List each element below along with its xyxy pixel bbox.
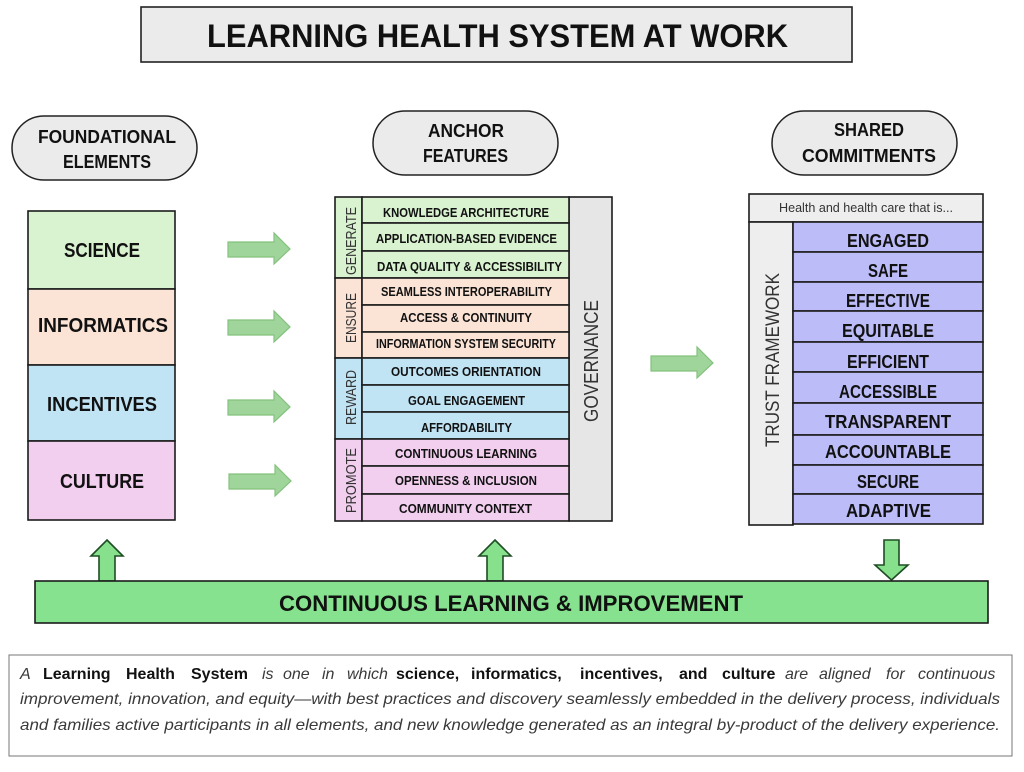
commitment list: EFFICIENT [847, 352, 929, 372]
definition text box: Learning [43, 666, 111, 683]
trust framework column [749, 222, 793, 525]
group: generate [335, 197, 569, 278]
arrow: features to commitments [651, 347, 713, 378]
arrow: incentives to features [228, 391, 290, 422]
block: science [28, 211, 175, 289]
trust framework column: TRUST FRAMEWORK [763, 273, 784, 447]
banner: continuous learning and improvement [35, 581, 988, 623]
block: culture [28, 441, 175, 520]
header: health and health care: Health and health care that is... [779, 200, 953, 215]
group: generate: KNOWLEDGE ARCHITECTURE [383, 205, 549, 220]
arrow: improvement up to anchor features [479, 540, 511, 581]
heading: foundational elements: FOUNDATIONAL [38, 127, 176, 147]
definition text box: one [283, 666, 310, 683]
definition text box: and [679, 666, 707, 683]
heading: foundational elements: ELEMENTS [63, 152, 151, 172]
group: generate: GENERATE [343, 207, 360, 275]
block: informatics: INFORMATICS [38, 315, 168, 337]
arrow: culture to features [229, 465, 291, 496]
commitment list: ADAPTIVE [846, 501, 931, 521]
heading: shared commitments: COMMITMENTS [802, 146, 936, 166]
block: incentives: INCENTIVES [47, 394, 157, 416]
commitment list: SAFE [868, 261, 908, 281]
banner: continuous learning and improvement: CONTINUOUS LEARNING & IMPROVEMENT [279, 591, 744, 616]
arrow: improvement up to foundational elements [91, 540, 123, 581]
heading: shared commitments: SHARED [834, 120, 904, 140]
definition text box: improvement, innovation, and equity—with best practices and discovery seamlessly embedded in the delivery process, individuals [20, 691, 1000, 708]
definition text box: culture [722, 666, 775, 683]
commitment list: SECURE [857, 472, 919, 492]
commitment list [793, 222, 983, 524]
group: reward: AFFORDABILITY [421, 420, 512, 435]
group: generate: APPLICATION-BASED EVIDENCE [376, 231, 557, 246]
commitment list: EQUITABLE [842, 321, 934, 341]
definition text box: and families active participants in all elements, and new knowledge generated as an integral by-product of the delivery experience. [20, 717, 1000, 734]
heading: anchor features: FEATURES [423, 146, 508, 166]
commitment list: ACCESSIBLE [839, 382, 937, 402]
definition text box: informatics, [471, 666, 562, 683]
title [141, 7, 852, 62]
group: ensure [335, 278, 569, 358]
panel: foundational elements [28, 211, 175, 520]
commitment list: ACCOUNTABLE [825, 442, 951, 462]
arrow: informatics to features [228, 311, 290, 342]
arrow: commitments down to improvement [875, 540, 908, 580]
group: reward: OUTCOMES ORIENTATION [391, 364, 541, 379]
group: promote: PROMOTE [343, 448, 360, 513]
group: promote [335, 439, 569, 521]
group: ensure: INFORMATION SYSTEM SECURITY [376, 336, 556, 351]
block: science: SCIENCE [64, 240, 140, 262]
group: ensure: SEAMLESS INTEROPERABILITY [381, 284, 552, 299]
commitment list: ENGAGED [847, 231, 929, 251]
definition text box: science, [396, 666, 459, 683]
definition text box: are [785, 666, 808, 683]
header: health and health care [749, 194, 983, 222]
commitment list: EFFECTIVE [846, 291, 930, 311]
block: informatics [28, 289, 175, 365]
group: ensure: ENSURE [343, 293, 360, 343]
group: reward [335, 358, 569, 439]
definition text box: aligned [819, 666, 872, 683]
definition text box: in [322, 666, 335, 683]
block: incentives [28, 365, 175, 441]
definition text box: A [19, 666, 31, 683]
definition text box: System [191, 666, 248, 683]
block: culture: CULTURE [60, 471, 144, 493]
definition text box: which [347, 666, 388, 683]
group: reward: GOAL ENGAGEMENT [408, 393, 525, 408]
panel: shared commitments [749, 194, 983, 525]
title: LEARNING HEALTH SYSTEM AT WORK [207, 18, 788, 54]
group: reward: REWARD [343, 370, 360, 425]
group: ensure: ACCESS & CONTINUITY [400, 310, 532, 325]
heading: anchor features [373, 111, 558, 175]
heading: shared commitments [772, 111, 957, 175]
group: promote: CONTINUOUS LEARNING [395, 446, 537, 461]
group: promote: COMMUNITY CONTEXT [399, 501, 532, 516]
heading: anchor features: ANCHOR [428, 121, 504, 141]
governance column: GOVERNANCE [581, 300, 603, 422]
heading: foundational elements [12, 116, 197, 180]
arrow: science to features [228, 233, 290, 264]
commitment list: TRANSPARENT [825, 412, 951, 432]
group: generate: DATA QUALITY & ACCESSIBILITY [377, 259, 562, 274]
group: promote: OPENNESS & INCLUSION [395, 473, 537, 488]
definition text box: incentives, [580, 666, 663, 683]
definition text box: Health [126, 666, 175, 683]
definition text box: continuous [918, 666, 995, 683]
definition text box: for [886, 666, 905, 683]
governance column [569, 197, 612, 521]
definition text box: is [262, 666, 274, 683]
panel: anchor features [335, 197, 612, 521]
definition text box [9, 655, 1012, 756]
